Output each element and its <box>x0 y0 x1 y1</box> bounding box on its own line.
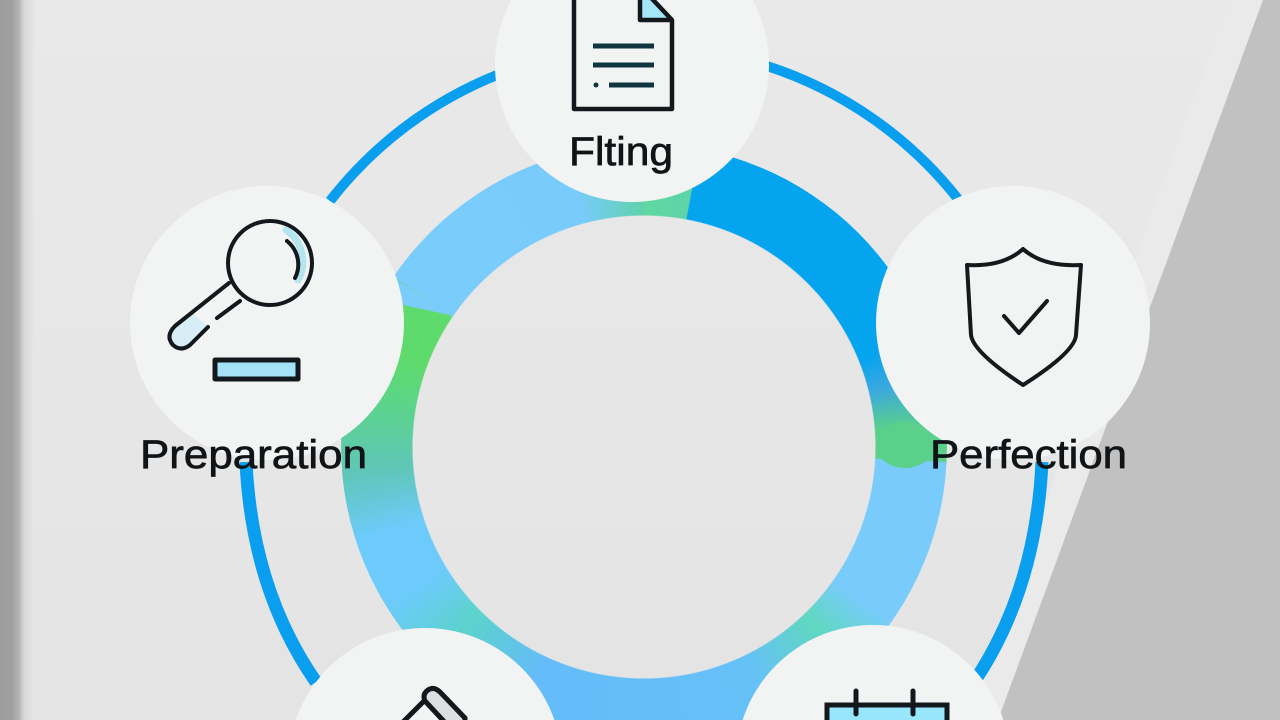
node: Perfection <box>876 186 1150 477</box>
node: bottom right <box>736 625 1010 720</box>
icon: shield with check <box>967 249 1081 385</box>
node: Filing <box>495 0 769 202</box>
thin outer blue ring <box>246 66 1042 682</box>
label: Perfection: Perfection <box>930 433 1127 477</box>
label: Preparation: Preparation <box>140 433 367 477</box>
background left shadow strip <box>0 0 36 720</box>
label: Filing: Flting <box>569 130 673 174</box>
icon: brush <box>403 688 465 720</box>
icon: magnifier <box>169 221 312 379</box>
node: Preparation <box>130 186 404 477</box>
icon: calendar <box>827 691 947 720</box>
ring segment boundary: light blue over green <box>394 278 450 315</box>
icon: document <box>574 0 672 109</box>
ring segment: green blob at Perfection <box>876 422 934 468</box>
node: bottom left <box>288 628 562 720</box>
thick segmented gradient ring <box>341 144 947 720</box>
